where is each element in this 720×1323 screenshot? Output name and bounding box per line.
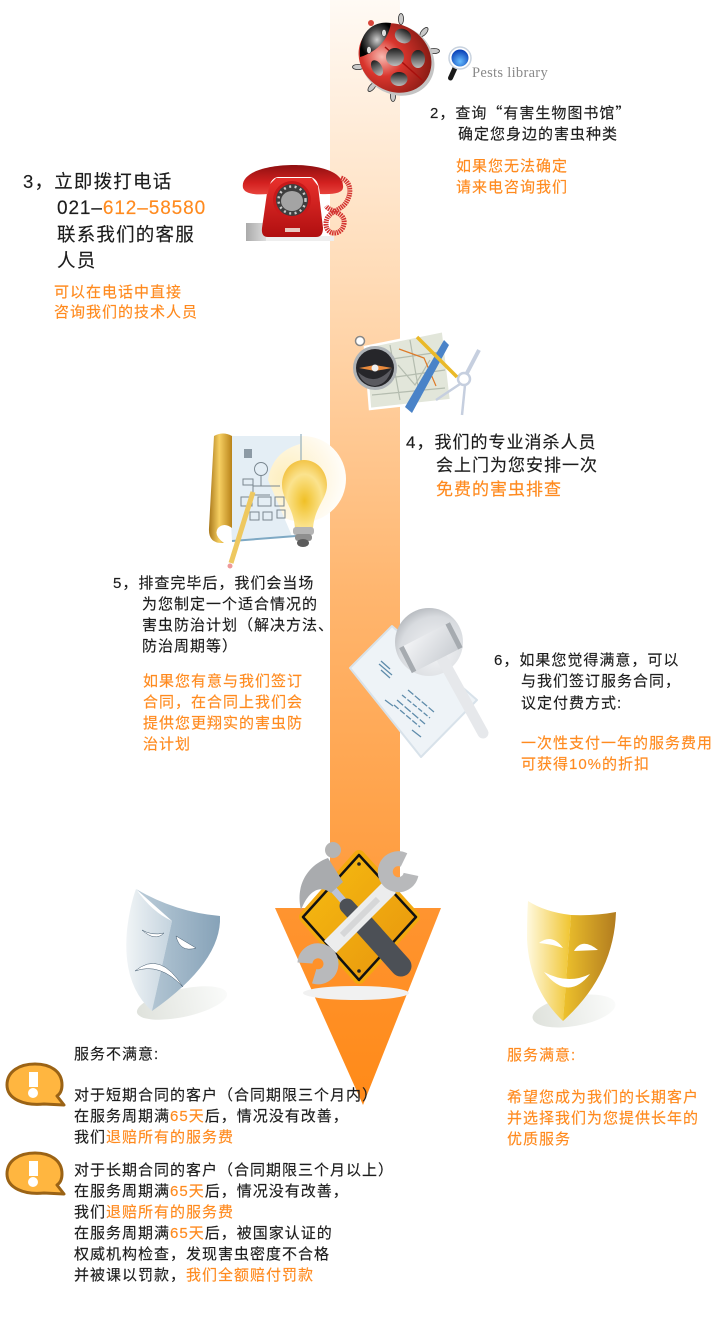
text block: step 5: 害虫防治计划（解决方法、 <box>142 617 334 634</box>
text block: step 5: 治计划 <box>143 736 191 753</box>
text block: step 4 <box>406 433 598 499</box>
text block: step 3: 人员 <box>57 250 96 271</box>
text block: step 3: 可以在电话中直接 <box>54 284 182 301</box>
text block: step 6: 与我们签订服务合同， <box>521 673 681 690</box>
text block: service unsatisfied: 我们退赔所有的服务费 <box>74 1129 234 1146</box>
text block: service satisfied: 服务满意: <box>507 1047 576 1064</box>
text block: service unsatisfied: 在服务周期满65天后，情况没有改善， <box>74 1108 349 1125</box>
text block: step 4: 会上门为您安排一次 <box>436 456 598 475</box>
text block: step 2 <box>430 102 631 196</box>
icon: red telephone <box>243 165 350 241</box>
text block: step 3: 咨询我们的技术人员 <box>54 304 198 321</box>
text block: step 5: 为您制定一个适合情况的 <box>142 596 318 613</box>
text block: step 5: 5，排查完毕后，我们会当场 <box>113 575 314 592</box>
text block: service satisfied: 并选择我们为您提供长年的 <box>507 1110 699 1127</box>
icon: gavel and contract <box>350 608 483 757</box>
text block: service unsatisfied: 并被课以罚款，我们全额赔付罚款 <box>74 1267 314 1284</box>
text block: step 5 <box>113 575 334 753</box>
icon: map and compass <box>353 331 479 415</box>
text block: service unsatisfied: 我们退赔所有的服务费 <box>74 1204 234 1221</box>
icon: alert bubble two <box>7 1153 64 1194</box>
text block: step 4: 4，我们的专业消杀人员 <box>406 433 596 452</box>
icon: blueprint and light bulb <box>209 434 346 568</box>
text block: step 2: 2，查询“有害生物图书馆” <box>430 102 631 123</box>
label: pests library: Pests library <box>472 65 548 81</box>
text block: service satisfied: 希望您成为我们的长期客户 <box>507 1089 699 1106</box>
icon: sad mask <box>126 889 230 1026</box>
text block: step 5: 合同，在合同上我们会 <box>143 694 303 711</box>
text block: step 6: 6，如果您觉得满意，可以 <box>494 652 679 669</box>
text block: service unsatisfied: 在服务周期满65天后，被国家认证的 <box>74 1225 333 1242</box>
text block: step 3: 021–612–58580 <box>57 198 206 219</box>
text block: step 6: 议定付费方式: <box>521 695 622 712</box>
text block: step 5: 防治周期等） <box>142 638 238 655</box>
text block: service unsatisfied <box>74 1046 394 1284</box>
text block: service unsatisfied: 权威机构检查，发现害虫密度不合格 <box>74 1246 330 1263</box>
text block: step 3: 3，立即拨打电话 <box>23 171 172 192</box>
text block: step 4: 免费的害虫排查 <box>436 480 562 499</box>
text block: step 6: 一次性支付一年的服务费用 <box>521 735 713 752</box>
bottom arrowhead <box>275 908 441 1105</box>
text block: step 2: 请来电咨询我们 <box>456 179 568 196</box>
central gradient bar <box>330 0 400 909</box>
text block: step 5: 提供您更翔实的害虫防 <box>143 715 303 732</box>
icon: happy mask <box>527 901 618 1033</box>
icon: alert bubble one <box>7 1064 64 1105</box>
text block: service satisfied <box>507 1047 699 1148</box>
text block: service unsatisfied: 对于短期合同的客户（合同期限三个月内） <box>74 1087 378 1104</box>
text block: step 6: 可获得10%的折扣 <box>521 756 650 773</box>
text block: service unsatisfied: 在服务周期满65天后，情况没有改善， <box>74 1183 349 1200</box>
icon: magnifier <box>449 47 471 78</box>
text block: service unsatisfied: 对于长期合同的客户（合同期限三个月以上） <box>74 1162 394 1179</box>
text block: step 5: 如果您有意与我们签订 <box>143 673 303 690</box>
text block: service unsatisfied: 服务不满意: <box>74 1046 159 1063</box>
text block: step 3: 联系我们的客服 <box>57 224 195 245</box>
text block: step 6 <box>494 652 713 773</box>
icon: ladybug <box>345 9 448 110</box>
text block: step 2: 如果您无法确定 <box>456 158 568 175</box>
text block: step 2: 确定您身边的害虫种类 <box>458 126 618 143</box>
text block: service satisfied: 优质服务 <box>507 1131 571 1148</box>
icon: road sign with tools <box>300 842 416 1000</box>
text block: step 3 <box>23 171 206 321</box>
